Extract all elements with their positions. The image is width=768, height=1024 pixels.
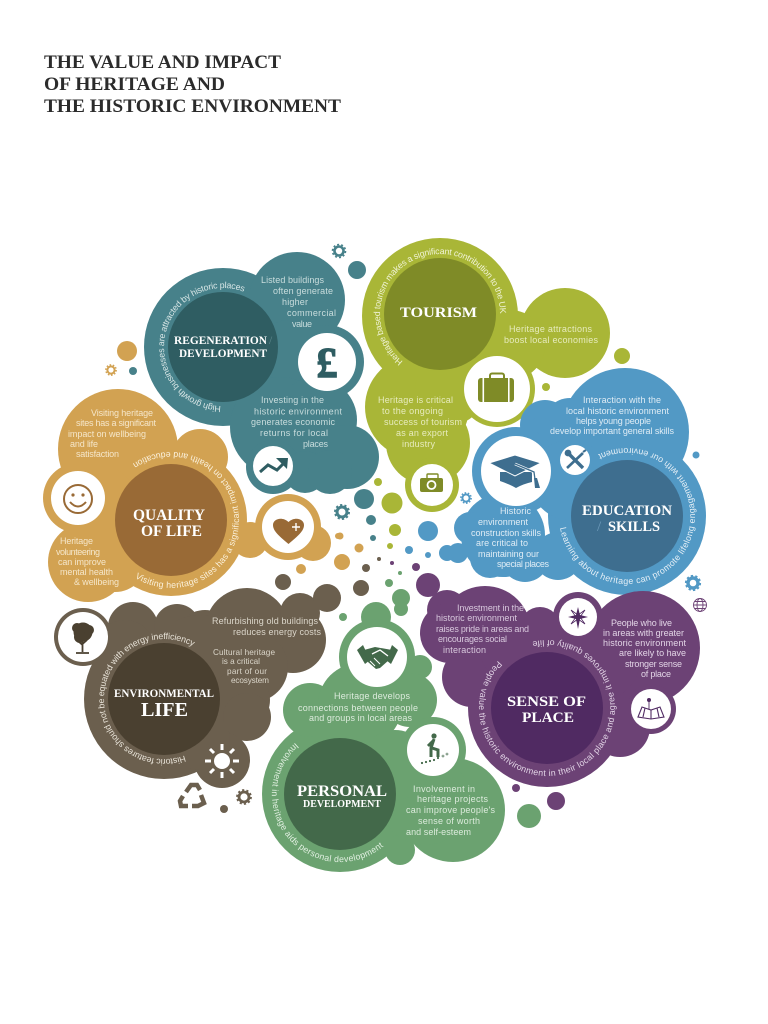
text: construction skills: construction skills [471, 528, 542, 538]
title: THE VALUE AND IMPACT [44, 53, 282, 73]
text: listed buildings: value [292, 319, 312, 329]
heading: / [597, 519, 602, 535]
heading: OF LIFE [141, 523, 202, 540]
panel: regeneration / development [144, 252, 379, 494]
text: wellbeing: and life [70, 439, 98, 449]
text: civic pride: interaction [443, 645, 486, 655]
text: connections: Heritage develops [334, 691, 410, 701]
panel: tourism [362, 238, 610, 512]
icon: gear tan [106, 365, 116, 375]
icon: pound [298, 333, 356, 391]
text: self-esteem: sense of worth [418, 816, 480, 826]
heading: DEVELOPMENT [303, 799, 381, 810]
icon: globe [694, 598, 706, 612]
heading: REGENERATION [174, 335, 268, 347]
text: civic pride: historic environment [436, 613, 517, 623]
curved statement: Involvement in heritage aids personal development [272, 743, 384, 862]
heading [114, 688, 214, 721]
text: volunteering: & wellbeing [74, 577, 119, 587]
text: export industry [378, 395, 462, 449]
text: connections: connections between people [298, 703, 418, 713]
title: OF HERITAGE AND [44, 75, 225, 95]
text: ecosystem: is a critical [222, 657, 260, 666]
icon: walker on steps [407, 724, 459, 776]
centre disc [571, 460, 683, 572]
text: listed buildings: higher [282, 297, 308, 307]
brown bubble shape [54, 584, 341, 788]
panel: education / skills [450, 368, 706, 595]
text: ecosystem [213, 648, 275, 685]
text: export industry: as an export [396, 428, 448, 438]
text: investing: returns for local [260, 428, 328, 438]
text: self-esteem: and self-esteem [406, 827, 471, 837]
text: connections [298, 691, 418, 723]
icon: gear brown [237, 790, 251, 804]
text: stronger sense of place: in areas with greater [603, 628, 684, 638]
heading: LIFE [141, 699, 188, 721]
text: interaction [550, 395, 674, 436]
teal bubble shape [144, 252, 379, 494]
centre disc [168, 292, 278, 402]
olive bubble shape [362, 238, 610, 512]
text: stronger sense of place [603, 618, 686, 679]
green bubble shape [262, 602, 505, 872]
icon: smiley [51, 471, 105, 525]
text: volunteering: volunteering [56, 547, 100, 557]
text: ecosystem: ecosystem [231, 676, 269, 685]
heading: PLACE [522, 710, 574, 726]
text: self-esteem [406, 784, 496, 837]
text: wellbeing [68, 408, 156, 459]
panel: personal development [262, 602, 505, 872]
text: stronger sense of place: of place [641, 669, 671, 679]
text: construction skills: are critical to [476, 538, 528, 548]
heading: / [269, 335, 273, 347]
text: wellbeing: Visiting heritage [91, 408, 153, 418]
text: export industry: Heritage is critical [378, 395, 453, 405]
icon: handshake [347, 627, 407, 687]
text: stronger sense of place: are likely to have [619, 648, 686, 658]
text: wellbeing: sites has a significant [76, 418, 156, 428]
text: wellbeing: satisfaction [76, 449, 119, 459]
title: THE HISTORIC ENVIRONMENT [44, 97, 342, 117]
text: attractions [504, 324, 598, 345]
text: wellbeing: impact on wellbeing [68, 429, 146, 439]
text: civic pride: raises pride in areas and [436, 624, 529, 634]
icon: gear blue small [461, 493, 471, 503]
icon: compass [559, 598, 597, 636]
panel: sense of place [416, 573, 700, 787]
blue bubble shape [448, 368, 706, 595]
heading [297, 783, 387, 810]
text: civic pride: encourages social [438, 634, 507, 644]
text: investing: historic environment [254, 406, 342, 416]
icon: map [631, 689, 671, 729]
text: listed buildings [261, 275, 336, 329]
text: listed buildings: often generate [273, 286, 333, 296]
heading: SENSE OF [507, 694, 586, 710]
icon: tools [560, 445, 590, 475]
text: volunteering: mental health [60, 567, 113, 577]
text: construction skills: Historic [500, 506, 532, 516]
icon: graduation cap [481, 436, 551, 506]
curved statement: Learning about heritage can promote lifelong engagement with our environment [560, 448, 696, 586]
heading [507, 694, 586, 726]
curved statement: Heritage based tourism makes a significant contribution to the UK [374, 248, 506, 366]
text: listed buildings: Listed buildings [261, 275, 324, 285]
heading: SKILLS [608, 519, 660, 535]
text: export industry: industry [402, 439, 436, 449]
centre disc [384, 258, 496, 370]
text: export industry: to the ongoing [382, 406, 443, 416]
text: interaction: develop important general skills [550, 426, 674, 436]
text: civic pride: Investment in the [457, 603, 524, 613]
icon: recycle [180, 785, 204, 806]
text: self-esteem: can improve people's [406, 805, 496, 815]
icon: gear teal top [332, 244, 346, 258]
heading [174, 335, 273, 360]
text: ecosystem: part of our [227, 667, 267, 676]
text: civic pride [436, 603, 529, 655]
icon: sun [205, 744, 239, 778]
text: stronger sense of place: historic environment [603, 638, 686, 648]
heading: QUALITY [133, 507, 205, 524]
title [44, 53, 342, 117]
text: export industry: success of tourism [384, 417, 462, 427]
curved statement: People value the historic environment in their local place and agree it improves quality of life [478, 640, 617, 776]
heading: TOURISM [400, 305, 477, 321]
heading: EDUCATION [582, 503, 672, 519]
text: interaction: local historic environment [566, 406, 669, 416]
icon: growth arrow [253, 446, 293, 486]
heading [582, 503, 672, 535]
text: listed buildings: commercial [287, 308, 336, 318]
text: investing: places [303, 439, 328, 449]
text: connections: and groups in local areas [309, 713, 412, 723]
icon: pound: £ [316, 341, 338, 387]
text: energy costs: reduces energy costs [233, 627, 322, 637]
icon: heart [262, 501, 314, 553]
tan bubble shape [43, 389, 331, 602]
text: investing: Investing in the [261, 395, 324, 405]
panel: quality of life [43, 389, 331, 602]
icon: tree [58, 612, 108, 662]
outer scattered dots [117, 261, 700, 828]
text: construction skills [471, 506, 550, 569]
icon: gear blue large [686, 576, 700, 590]
heading [133, 507, 205, 540]
icon: camera [411, 464, 453, 506]
icon: gear teal centre [335, 505, 349, 519]
text: energy costs [212, 616, 322, 637]
icon: suitcase [464, 356, 530, 422]
heading: ENVIRONMENTAL [114, 688, 214, 700]
centre disc [284, 738, 396, 850]
text: attractions: Heritage attractions [509, 324, 592, 334]
text: self-esteem: heritage projects [417, 794, 488, 804]
text: construction skills: maintaining our [478, 549, 539, 559]
heading: DEVELOPMENT [179, 348, 267, 360]
centre disc [491, 652, 603, 764]
text: ecosystem: Cultural heritage [213, 648, 275, 657]
centre disc [108, 643, 220, 755]
panel: environmental life [54, 584, 341, 788]
curved statement: Historic features should not be equated with energy inefficiency [98, 632, 195, 766]
text: interaction: helps young people [576, 416, 651, 426]
text: stronger sense of place: People who live [611, 618, 672, 628]
text: volunteering: can improve [58, 557, 106, 567]
heading: PERSONAL [297, 783, 387, 800]
text: investing [251, 395, 342, 449]
text: construction skills: environment [478, 517, 528, 527]
central scattered dots [275, 478, 455, 621]
curved statement: High growth businesses are attracted by historic places [159, 282, 245, 412]
text: construction skills: special places [497, 559, 550, 569]
text: attractions: boost local economies [504, 335, 598, 345]
text: volunteering [56, 536, 119, 587]
curved statement: Visiting heritage sites has a significant impact on health and education [133, 452, 240, 590]
text: investing: generates economic [251, 417, 336, 427]
text: volunteering: Heritage [60, 536, 93, 546]
text: self-esteem: Involvement in [413, 784, 475, 794]
text: energy costs: Refurbishing old buildings [212, 616, 318, 626]
text: stronger sense of place: stronger sense [625, 659, 682, 669]
text: interaction: Interaction with the [583, 395, 661, 405]
centre disc [115, 464, 227, 576]
purple bubble shape [416, 573, 700, 787]
